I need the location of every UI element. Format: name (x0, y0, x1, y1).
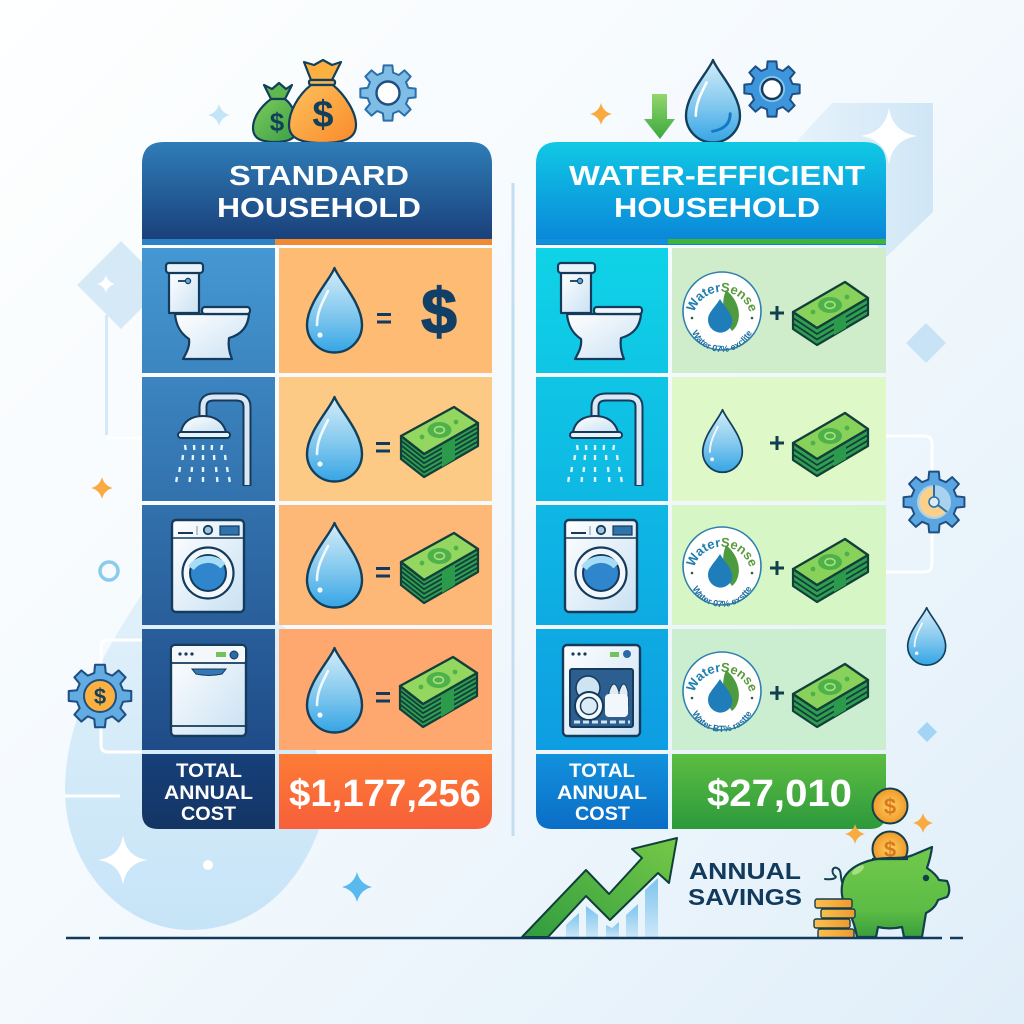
icon: right gear with gauge (904, 472, 964, 532)
total annual cost value: $27,010 (707, 773, 852, 815)
arrow (522, 838, 677, 937)
total annual cost label: TOTAL (176, 761, 242, 782)
icon: left gear with dollar (69, 665, 131, 727)
icon: green money bag: $ (270, 107, 285, 137)
row 2 values: small drop plus money (703, 410, 868, 476)
row 1 values: drop equals dollar (307, 268, 457, 352)
appliance column (142, 248, 275, 750)
cost column (279, 248, 492, 750)
icon: shower (176, 397, 247, 486)
decor: left diamond with sparkle (77, 241, 165, 438)
icon: toilet (166, 263, 250, 359)
row 3 values: drop equals money (307, 523, 478, 608)
icon: right water drop (908, 608, 946, 665)
icon: dishwasher (171, 645, 246, 736)
icon: shower (568, 397, 639, 486)
icon: dishwasher with dishes (563, 645, 640, 736)
icon: gear top right (744, 61, 800, 117)
savings column (672, 248, 886, 750)
icon: piggy bank (825, 847, 949, 937)
badge: WaterSense: WaterSense (686, 282, 756, 312)
row 4 values: WaterSense badge plus money (682, 651, 870, 732)
total annual cost label (536, 754, 668, 829)
row 2 values: drop equals money (307, 397, 478, 482)
total annual cost value (279, 754, 492, 829)
decor: pale shape behind right header (797, 103, 933, 257)
annual savings label: SAVINGS (688, 884, 802, 910)
row 4 values: drop equals money (307, 648, 477, 732)
badge: WaterSense (682, 651, 762, 732)
decor: sparkles and shapes (91, 103, 946, 902)
heading: water-efficient household: WATER-EFFICIENT (569, 160, 865, 191)
annual savings label: ANNUAL (689, 858, 801, 884)
icon: orange money bag: $ (312, 94, 334, 136)
badge: WaterSense: WaterSense (686, 538, 756, 566)
badge: WaterSense (682, 526, 762, 607)
icon: large water drop (686, 60, 740, 143)
icon: falling coins: $ (884, 794, 896, 819)
chart: rising arrow with bars (522, 838, 677, 938)
icon: money bags (253, 60, 356, 143)
ground line (66, 937, 963, 939)
annual savings label (688, 858, 802, 910)
icon: washing machine (565, 520, 637, 612)
panel: water-efficient household (536, 142, 886, 829)
icon: green down arrow (644, 94, 675, 139)
badge: WaterSense: Water BT% rastte (692, 710, 751, 732)
row 1 values: WaterSense badge plus money (682, 271, 870, 352)
badge: WaterSense: Water 07% exstte (693, 585, 751, 607)
icon: falling coins: $ (884, 837, 896, 862)
total annual cost label (142, 754, 275, 829)
heading: standard household: STANDARD (229, 160, 409, 191)
total annual cost value: $1,177,256 (289, 773, 481, 815)
badge: WaterSense: Water 07% exclite (692, 329, 752, 352)
icon: toilet (558, 263, 642, 359)
total annual cost value (672, 754, 886, 829)
icon: gear top left (360, 65, 416, 121)
decor: pale drop shape (65, 540, 325, 930)
heading: water-efficient household (536, 142, 886, 245)
icon: falling coins (845, 788, 933, 866)
total annual cost label: COST (181, 804, 236, 825)
decor: right connector bracket (886, 436, 932, 572)
panel: standard household (142, 142, 492, 829)
total annual cost label: TOTAL (569, 761, 635, 782)
total annual cost label: COST (575, 804, 630, 825)
icon: washing machine (172, 520, 244, 612)
decor: left connectors (65, 640, 142, 796)
heading: standard household (142, 142, 492, 245)
icon: left gear with dollar: $ (94, 684, 106, 709)
badge: WaterSense: WaterSense (686, 662, 756, 692)
badge: WaterSense (682, 271, 762, 352)
heading: standard household: HOUSEHOLD (217, 192, 421, 223)
total annual cost label: ANNUAL (164, 783, 253, 804)
total annual cost label: ANNUAL (557, 783, 647, 804)
appliance column (536, 248, 668, 750)
row 3 values: WaterSense badge plus money (682, 526, 870, 607)
heading: water-efficient household: HOUSEHOLD (614, 192, 820, 223)
bars (566, 878, 658, 938)
icon: coin stack (814, 899, 855, 938)
decor: centre divider (512, 183, 514, 836)
row 1 values: drop equals dollar: $ (421, 275, 457, 347)
